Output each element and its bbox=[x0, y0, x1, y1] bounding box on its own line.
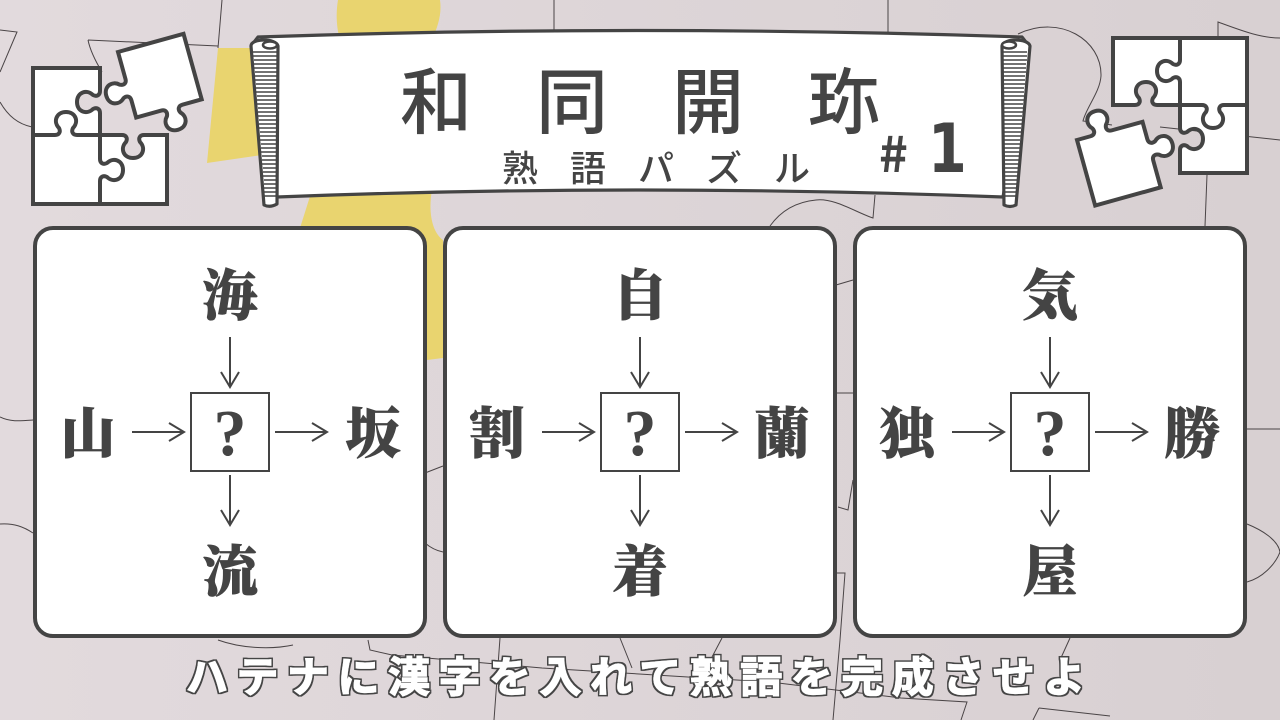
yellow missing puzzle piece bbox=[207, 0, 443, 360]
panel: puzzle 2: 蘭 bbox=[754, 390, 810, 469]
panel: puzzle 3: 気 bbox=[1022, 252, 1078, 331]
panel: puzzle 2: ? bbox=[624, 397, 656, 470]
panel: puzzle 3: 屋 bbox=[1022, 528, 1078, 607]
panel: puzzle 1: 海 bbox=[202, 252, 258, 331]
issue number: 1 bbox=[928, 109, 967, 188]
issue number: # bbox=[879, 116, 908, 187]
subtitle: 熟語パズル bbox=[502, 148, 842, 189]
issue number bbox=[879, 109, 967, 188]
panel: puzzle 3: 独 bbox=[879, 390, 940, 469]
icon: puzzle right bbox=[1071, 38, 1247, 206]
panel: puzzle 1: 流 bbox=[202, 528, 260, 607]
panel: puzzle 2: 着 bbox=[612, 528, 668, 607]
banner right roll bbox=[1002, 40, 1030, 206]
panel: puzzle 1: 山 bbox=[60, 390, 116, 469]
panel: puzzle 3 bbox=[855, 228, 1245, 636]
panel: puzzle 1: 坂 bbox=[345, 390, 401, 469]
banner left roll bbox=[251, 40, 278, 206]
panel: puzzle 3: 勝 bbox=[1164, 390, 1220, 469]
panel: puzzle 2: 割 bbox=[467, 390, 525, 469]
panel: puzzle 1: ? bbox=[214, 397, 246, 470]
icon: puzzle left bbox=[33, 34, 208, 204]
panel: puzzle 1 bbox=[35, 228, 425, 636]
panel: puzzle 2: 自 bbox=[612, 252, 668, 331]
panel: puzzle 3: ? bbox=[1034, 397, 1066, 470]
title banner bbox=[251, 30, 1030, 206]
panel: puzzle 2 bbox=[445, 228, 835, 636]
instruction caption: ハテナに漢字を入れて熟語を完成させよ bbox=[186, 654, 1094, 701]
title: 和同開珎 bbox=[400, 64, 944, 144]
